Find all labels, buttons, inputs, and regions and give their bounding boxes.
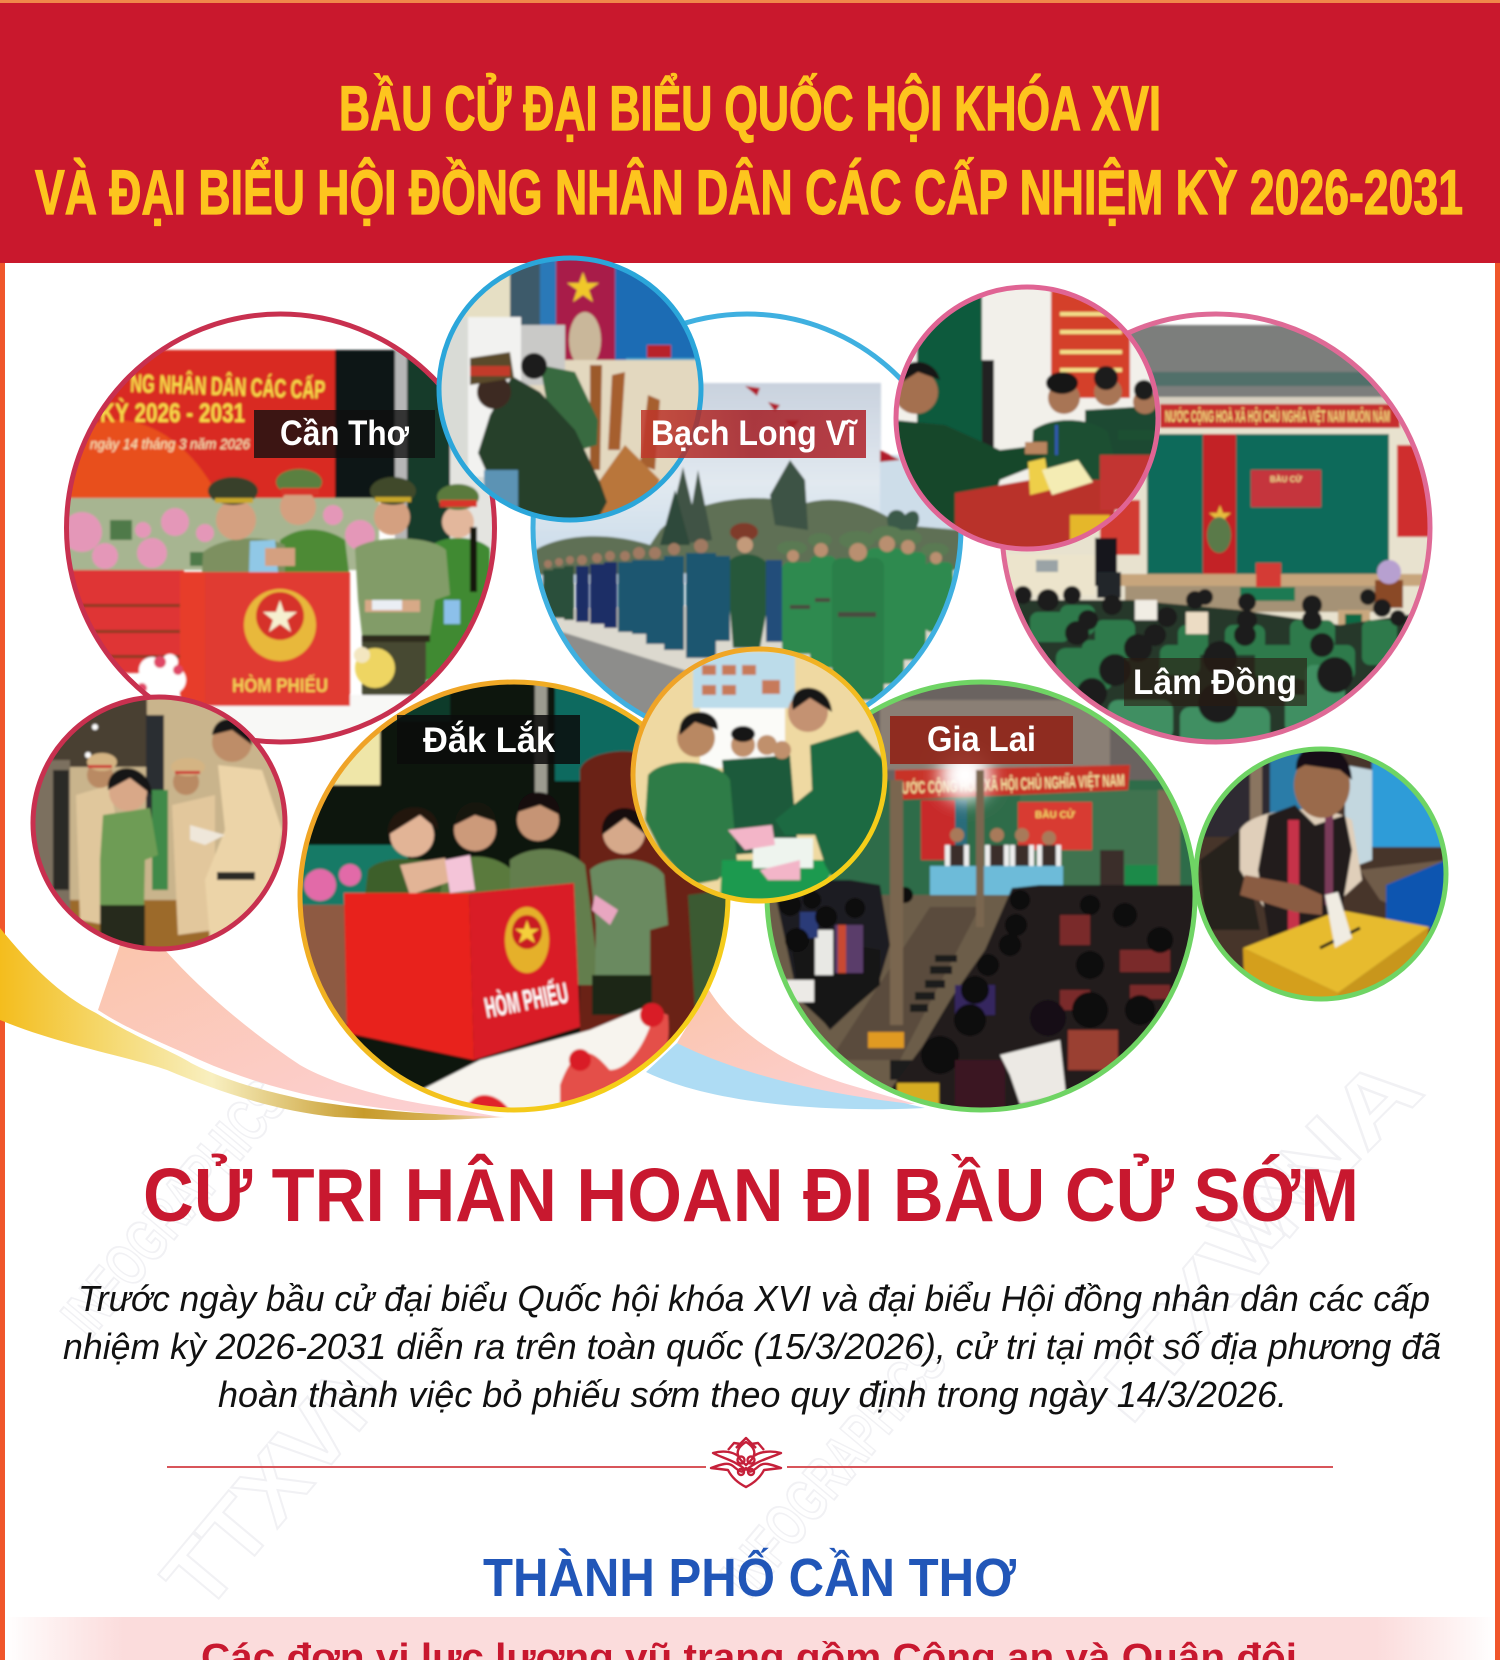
main heading: CỬ TRI HÂN HOAN ĐI BẦU CỬ SỚM — [143, 1153, 1359, 1237]
label: Bạch Long Vĩ: Bạch Long Vĩ — [651, 414, 858, 453]
intro paragraph — [63, 1278, 1441, 1415]
watermarks — [49, 1037, 1441, 1628]
intro paragraph: nhiệm kỳ 2026-2031 diễn ra trên toàn quốc (15/3/2026), cử tri tại một số địa phương đã — [63, 1326, 1441, 1367]
label: Gia Lai: Gia Lai — [927, 720, 1036, 759]
peach ribbon right — [677, 990, 915, 1104]
lotus mural — [64, 498, 379, 570]
white table — [380, 1005, 660, 1111]
tan uniformed officers — [76, 785, 118, 925]
label: Gia Lai — [890, 716, 1073, 764]
label: Đắk Lắk: Đắk Lắk — [423, 720, 556, 760]
ballot boxes — [955, 480, 1115, 552]
photo circle: Đắk Lắk inset — [632, 648, 886, 904]
right crowd clothing — [1060, 915, 1170, 1010]
blue soldier behind — [766, 560, 782, 642]
heads row — [544, 539, 708, 568]
light glare — [939, 749, 991, 801]
photo: border guards with ballots — [632, 648, 886, 904]
yellow shirt — [897, 1083, 939, 1108]
right soldier — [688, 890, 728, 1010]
photo: community voting hall: NƯỚC CỘNG HOÀ XÃ HỘI CHỦ NGHĨA VIỆT NAM — [894, 770, 1125, 798]
tree line — [535, 498, 960, 575]
gold ribbon — [0, 928, 505, 1120]
left crowd heads — [779, 887, 913, 952]
middle soldiers — [722, 755, 798, 855]
photo: troops in formation — [536, 382, 958, 714]
woman voter — [365, 859, 470, 895]
blue box — [1386, 860, 1446, 930]
officials at table — [945, 845, 1061, 867]
photo: meeting hall: BẦU CỬ — [1270, 474, 1302, 484]
voter head — [1294, 752, 1350, 818]
first soldier — [478, 376, 607, 525]
woman officer — [100, 808, 158, 910]
voter arm — [1240, 875, 1322, 915]
ribbon swooshes — [0, 928, 925, 1120]
photo circle: Bạch Long Vĩ inset — [437, 256, 707, 525]
icon: lotus — [711, 1438, 781, 1487]
officer 4 — [425, 538, 490, 680]
pink band with sub heading — [5, 1617, 1495, 1660]
right border — [1495, 0, 1500, 1660]
label: Cần Thơ — [254, 410, 435, 458]
voter vest — [1258, 805, 1352, 945]
orange sandals — [868, 1032, 904, 1048]
photo: border guards voting — [894, 286, 1165, 556]
left soldier — [645, 762, 737, 885]
table — [720, 860, 840, 900]
ballot papers — [728, 825, 775, 850]
ballot box — [344, 893, 474, 1060]
left border — [0, 0, 5, 1660]
red drapes — [465, 1095, 510, 1111]
photo: officers voting — [62, 350, 510, 755]
emblem — [244, 589, 316, 661]
intro paragraph: hoàn thành việc bỏ phiếu sớm theo quy định trong ngày 14/3/2026. — [218, 1374, 1287, 1415]
center guard — [1030, 420, 1120, 490]
voter shirt — [1240, 809, 1362, 930]
left crowd — [772, 880, 890, 1030]
photo: police officers voting — [298, 681, 740, 1111]
intro paragraph: Trước ngày bầu cử đại biểu Quốc hội khóa XVI và đại biểu Hội đồng nhân dân các cấp — [78, 1278, 1430, 1319]
ballot box — [180, 572, 206, 706]
box emblem — [505, 907, 549, 973]
label: Đắk Lắk — [397, 715, 580, 764]
road and pavement — [554, 604, 932, 703]
left guard — [895, 420, 1045, 540]
blue ribbon — [646, 1043, 925, 1109]
stage floor and steps — [1090, 574, 1430, 586]
ballot and hand — [249, 540, 278, 572]
maroon shirt — [955, 1060, 1005, 1110]
stage curtain — [1147, 434, 1389, 574]
posts — [890, 780, 903, 1025]
chairs — [590, 365, 602, 470]
woman's arm and ballot — [400, 858, 455, 895]
photo: voter with yellow ballot box — [1195, 745, 1447, 1005]
peach ribbon left — [98, 945, 500, 1117]
photo circle: Cần Thơ main — [62, 313, 510, 755]
flowers — [135, 654, 186, 695]
flags — [745, 386, 900, 462]
teal soldiers — [618, 553, 730, 658]
right crowd heads — [921, 890, 1173, 1074]
photo: community voting hall — [765, 681, 1197, 1115]
photo circle: Bạch Long Vĩ main — [530, 313, 970, 750]
officer 1 — [202, 538, 285, 572]
audience heads — [1014, 586, 1406, 723]
label: Cần Thơ: Cần Thơ — [280, 414, 409, 453]
woman officer 4 — [590, 859, 668, 975]
background guards — [1085, 405, 1165, 470]
section heading: Thành phố Cần Thơ: THÀNH PHỐ CẦN THƠ — [483, 1548, 1016, 1608]
photo: officers voting: NG NHÂN DÂN CÁC CẤP — [130, 368, 326, 405]
photo circle: Lâm Đồng inset — [894, 286, 1165, 556]
ballot papers — [1028, 458, 1050, 495]
photo circle: Gia Lai main — [765, 681, 1197, 1115]
photo: traffic police — [32, 697, 288, 955]
photo circle: Đắk Lắk main — [298, 681, 740, 1111]
navy soldiers — [576, 562, 617, 628]
child in white — [1000, 1040, 1066, 1104]
green soldiers — [782, 548, 953, 684]
right crowd — [890, 885, 1197, 1115]
red bench — [64, 570, 184, 673]
ballot — [1325, 892, 1352, 948]
photo: police officers voting: HÒM PHIẾU — [482, 975, 571, 1025]
far left soldiers — [543, 566, 574, 620]
photo: meeting hall — [1000, 325, 1440, 750]
red flags and poster — [921, 800, 955, 860]
photo circle: Cần Thơ inset — [32, 696, 288, 955]
watermarks: TTXVN — [144, 1334, 413, 1628]
wood floor — [765, 895, 1197, 1115]
watermarks: INFOGRAPHICS — [709, 1328, 959, 1608]
watermarks: VNA — [1193, 1037, 1441, 1284]
officer 3 — [355, 538, 450, 635]
yellow ballot box — [1243, 910, 1429, 993]
photo circle: Gia Lai inset — [1195, 745, 1447, 1005]
male officer 3 — [510, 849, 600, 985]
photo circle: Lâm Đồng main — [1000, 313, 1440, 750]
second soldier — [540, 365, 598, 450]
photo: officers voting: ngày 14 tháng 3 năm 2026 — [90, 436, 251, 453]
watermarks: INFOGRAPHICS — [49, 1068, 299, 1348]
right soldier — [775, 730, 884, 890]
audience shoulders — [1017, 598, 1410, 736]
label: Lâm Đồng: Lâm Đồng — [1133, 663, 1297, 702]
photo: officers voting: HÒM PHIẾU — [232, 675, 328, 697]
booth partitions — [442, 317, 484, 484]
white table below — [179, 693, 412, 740]
green tables and floor — [1337, 609, 1371, 627]
sandals row — [890, 955, 957, 1080]
photo: community voting hall: BẦU CỬ — [1035, 808, 1076, 821]
photo: soldiers in booths — [437, 256, 707, 525]
photo: officers voting: KỲ 2026 - 2031 — [100, 397, 245, 428]
army officer — [730, 554, 766, 648]
divider right — [787, 1466, 1333, 1468]
header banner — [0, 0, 1500, 263]
male officer 2 — [440, 857, 525, 895]
left crowd clothing — [835, 925, 863, 973]
watermarks: TTXVN — [1059, 1136, 1347, 1453]
divider left — [167, 1466, 706, 1468]
officer 2 — [280, 529, 349, 572]
